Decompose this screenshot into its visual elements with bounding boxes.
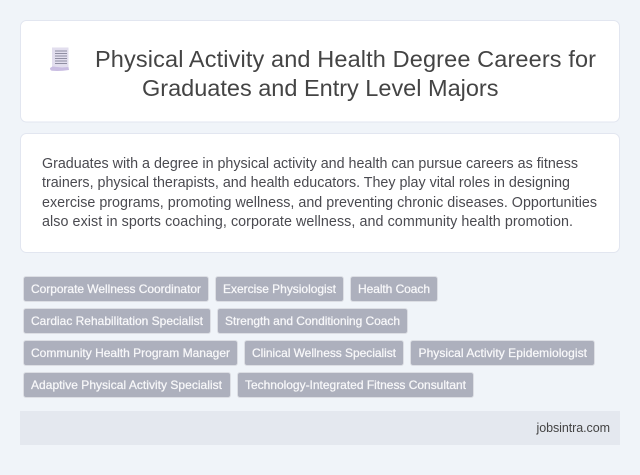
tag: Exercise Physiologist: Exercise Physiologist (223, 282, 337, 296)
title: Physical Activity and Health Degree Careers for (95, 46, 596, 72)
tag list (24, 276, 594, 398)
tag: Cardiac Rehabilitation Specialist: Cardiac Rehabilitation Specialist (31, 314, 204, 328)
footer bar (20, 411, 620, 445)
icon: document scroll (50, 48, 69, 71)
tag: Physical Activity Epidemiologist (410, 340, 594, 366)
tag: Clinical Wellness Specialist (244, 340, 404, 366)
tag: Community Health Program Manager: Community Health Program Manager (31, 346, 230, 360)
tag: Health Coach: Health Coach (358, 282, 430, 296)
text block: description: trainers, physical therapists, and health educators. They play vital roles in designing (42, 175, 570, 191)
tag: Corporate Wellness Coordinator (24, 276, 208, 302)
tag: Adaptive Physical Activity Specialist (24, 372, 230, 398)
tag: Strength and Conditioning Coach: Strength and Conditioning Coach (225, 314, 400, 328)
panel: header card (20, 20, 620, 122)
tag: Technology-Integrated Fitness Consultant (238, 372, 474, 398)
tag: Strength and Conditioning Coach (218, 308, 408, 334)
tag: Clinical Wellness Specialist: Clinical Wellness Specialist (252, 346, 397, 360)
title (95, 46, 596, 101)
text block: description (42, 156, 597, 230)
tag: Physical Activity Epidemiologist: Physical Activity Epidemiologist (418, 346, 588, 360)
footer source text: jobsintra.com (536, 421, 610, 435)
tag: Cardiac Rehabilitation Specialist (24, 308, 210, 334)
text block: description: exercise programs, promoting wellness, and preventing chronic diseases. Opportunities (42, 195, 597, 211)
title: Graduates and Entry Level Majors (142, 75, 498, 101)
tag: Community Health Program Manager (24, 340, 238, 366)
tag: Exercise Physiologist (216, 276, 344, 302)
text block: description: also exist in sports coaching, corporate wellness, and community health promotion. (42, 214, 573, 230)
text block: description: Graduates with a degree in physical activity and health can pursue careers as fitness (42, 156, 578, 172)
panel: description card (20, 134, 620, 252)
tag: Adaptive Physical Activity Specialist: Adaptive Physical Activity Specialist (31, 378, 223, 392)
tag: Technology-Integrated Fitness Consultant: Technology-Integrated Fitness Consultant (245, 378, 467, 392)
tag: Health Coach (350, 276, 438, 302)
tag: Corporate Wellness Coordinator: Corporate Wellness Coordinator (31, 282, 201, 296)
